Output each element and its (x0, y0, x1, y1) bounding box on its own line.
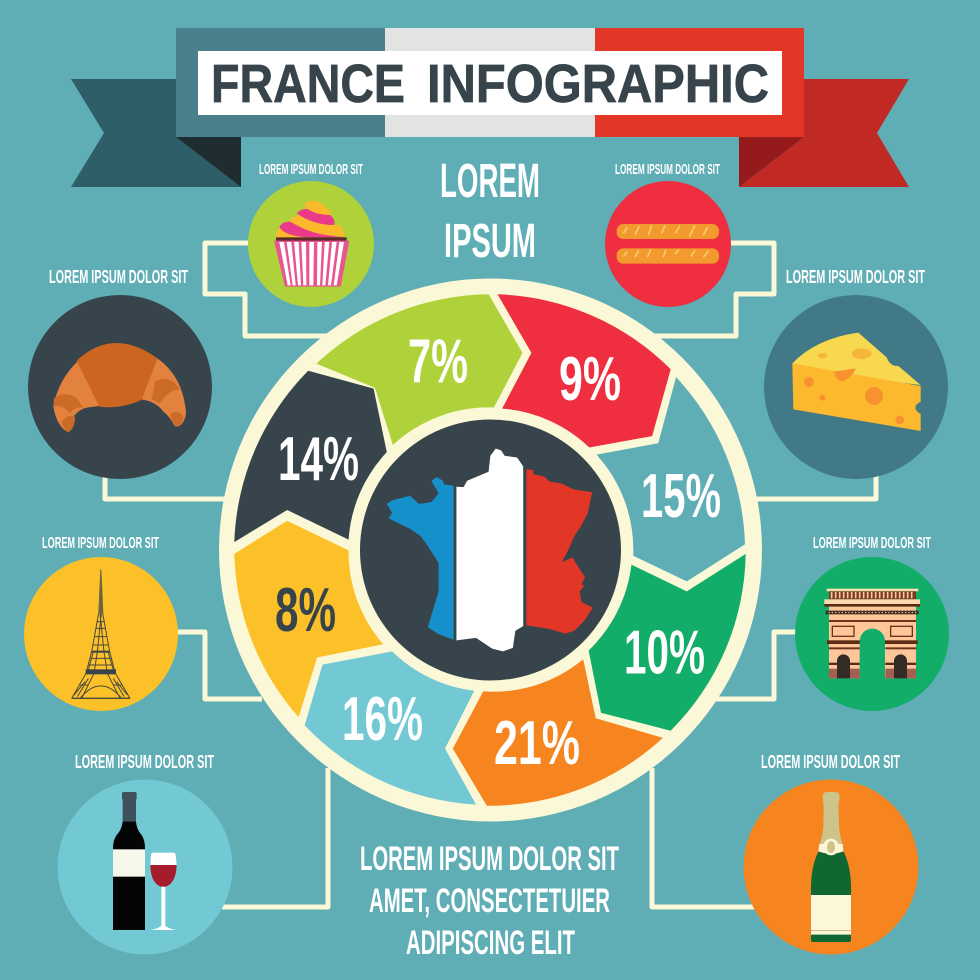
heading: lorem ipsum (440, 155, 540, 268)
item: champagne (744, 751, 918, 954)
bottom text block (360, 840, 619, 962)
icon: arc de triomphe (824, 589, 920, 679)
chart segments (234, 294, 746, 806)
connector lines (105, 243, 876, 907)
right ribbon tail (739, 79, 909, 187)
label: LOREM IPSUM DOLOR SIT (259, 162, 363, 178)
item: wine (58, 751, 232, 954)
percentage values: 7% (408, 328, 468, 396)
circle (24, 557, 178, 711)
label: LOREM IPSUM DOLOR SIT (49, 266, 188, 287)
segment: 7% (316, 294, 522, 445)
percentage values: 21% (494, 709, 580, 778)
percentage values: 16% (342, 685, 423, 754)
title plate (198, 51, 782, 115)
percentage values: 9% (559, 345, 621, 414)
pie chart (219, 278, 762, 822)
segment: 9% (497, 294, 671, 447)
item: croissant (28, 266, 212, 479)
item: cheese (764, 266, 948, 479)
label: LOREM IPSUM DOLOR SIT (42, 535, 159, 552)
item: eiffel tower (24, 535, 178, 711)
segment: 15% (596, 377, 745, 581)
title: FRANCE (211, 54, 405, 114)
icon: cupcake (274, 201, 349, 287)
circle (248, 181, 374, 307)
title banner (71, 28, 909, 187)
segment: 10% (589, 554, 746, 731)
icon: wine bottle and glass (113, 792, 177, 930)
left ribbon tail (71, 79, 241, 187)
percentage values: 10% (624, 618, 705, 688)
circle (58, 780, 232, 954)
center hub (350, 410, 631, 690)
label: LOREM IPSUM DOLOR SIT (75, 751, 214, 772)
percentage values: 14% (278, 425, 359, 494)
icon: baguettes (617, 224, 719, 264)
map of france (387, 449, 593, 651)
item: cupcake (248, 162, 374, 307)
right ribbon fold (739, 137, 804, 187)
icon: cheese (792, 333, 921, 431)
title: INFOGRAPHIC (427, 54, 769, 114)
item: baguette (605, 162, 731, 307)
percentage values: 15% (641, 462, 721, 531)
segment: 14% (234, 371, 387, 542)
segment: 16% (305, 651, 476, 805)
heading: lorem ipsum: IPSUM (444, 215, 536, 268)
segment: 8% (234, 521, 383, 717)
icon: croissant (53, 343, 186, 432)
left ribbon fold (176, 137, 241, 187)
circle (605, 181, 731, 307)
circle (764, 295, 948, 479)
percentage values (275, 328, 721, 778)
circle (744, 780, 918, 954)
circle (28, 295, 212, 479)
segment: 21% (453, 659, 663, 806)
percentage values: 8% (275, 576, 336, 645)
icon: eiffel tower (72, 569, 130, 698)
label: LOREM IPSUM DOLOR SIT (615, 162, 720, 178)
bottom text block: LOREM IPSUM DOLOR SIT (360, 840, 619, 878)
circle (795, 557, 949, 711)
bottom text block: AMET, CONSECTETUIER (369, 882, 610, 920)
bottom text block: ADIPISCING ELIT (406, 924, 575, 962)
map: white part (456, 449, 523, 651)
item: arc de triomphe (795, 535, 949, 711)
map: red part (526, 469, 593, 634)
heading: lorem ipsum: LOREM (440, 155, 540, 208)
tricolor band (176, 28, 804, 137)
icon: champagne bottle (811, 792, 851, 942)
title (211, 54, 769, 114)
map: blue part (387, 477, 454, 640)
chart ring (219, 278, 762, 822)
